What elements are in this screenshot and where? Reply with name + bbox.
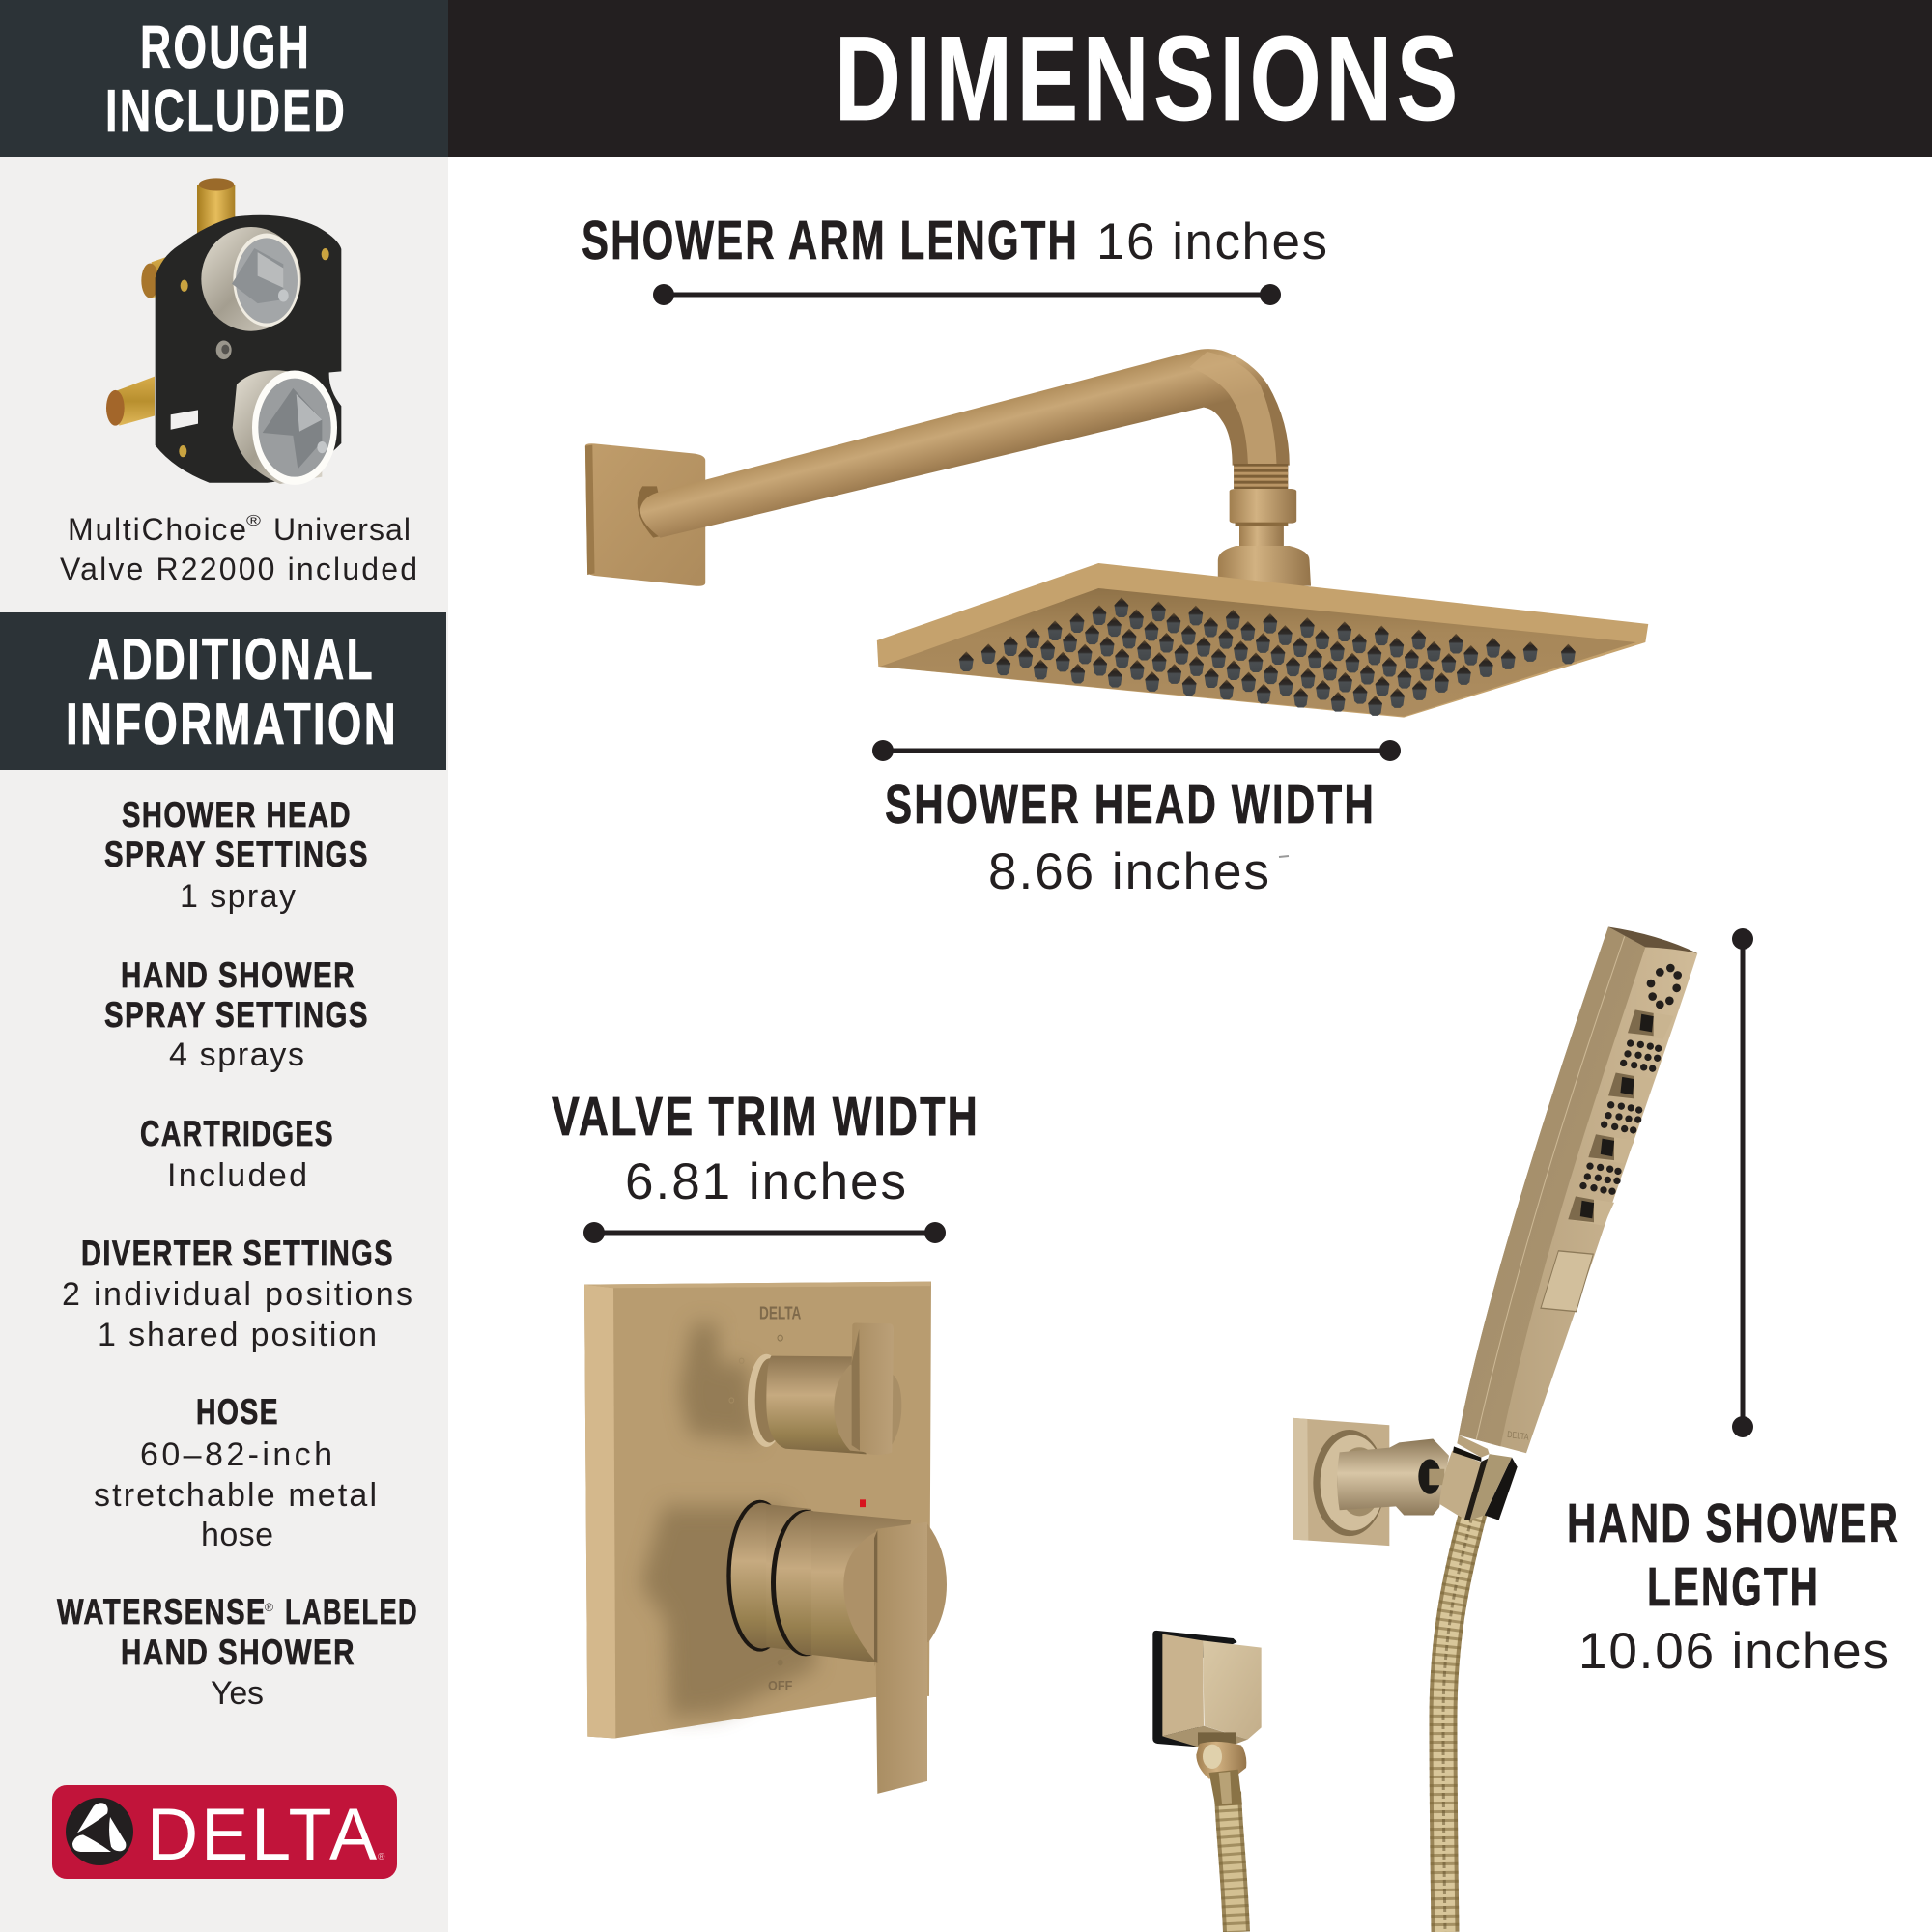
label: shower arm length: SHOWER ARM LENGTH (582, 210, 1079, 271)
image: shower arm and rain head (585, 349, 1648, 718)
spec: hose: stretchable metal (94, 1477, 377, 1514)
header panel: rough included: ROUGH (140, 14, 311, 81)
image: wall outlet elbow and hose (1152, 1631, 1262, 1932)
plate shadows (640, 1323, 818, 1717)
spec: hose: HOSE (196, 1392, 279, 1432)
threads and drop fitting (1218, 464, 1311, 586)
heading panel: additional information: ADDITIONAL (88, 627, 375, 692)
spec: hose: hose (201, 1517, 273, 1553)
label: valve trim width: VALVE TRIM WIDTH (552, 1086, 980, 1148)
spec: WaterSense labeled hand shower: WATERSENSE (57, 1592, 267, 1632)
label: shower head width dimension line (872, 740, 1401, 761)
label: valve trim width: 6.81 inches (625, 1153, 906, 1210)
header panel: rough included: INCLUDED (105, 78, 347, 145)
spec: WaterSense labeled hand shower: LABELED (285, 1592, 418, 1632)
lower temperature handle (726, 1500, 947, 1794)
spec: shower head spray settings: SPRAY SETTINGS (104, 835, 369, 874)
dimension line: shower arm (653, 284, 1281, 305)
label: shower head width: 8.66 inches (988, 843, 1269, 900)
logo: Delta (52, 1785, 397, 1879)
spec: hose: 60–82-inch (140, 1436, 332, 1473)
image: hand shower and wall bracket (1293, 927, 1697, 1546)
holder (1439, 1451, 1485, 1520)
spec: cartridges (140, 1114, 334, 1194)
wall flange (585, 443, 705, 586)
heading panel: additional information (0, 612, 446, 770)
spec: shower head spray settings: 1 spray (180, 878, 296, 915)
red marker (860, 1499, 866, 1507)
left sidebar background (0, 157, 448, 1932)
spray dots (1579, 1039, 1662, 1195)
button (1541, 1251, 1593, 1312)
trim plate (584, 1282, 931, 1739)
spec: cartridges: CARTRIDGES (140, 1114, 334, 1153)
image: MultiChoice rough-in valve (106, 178, 341, 485)
dimension line: hand shower length (1732, 928, 1753, 1437)
image: valve trim plate and handles (584, 1282, 947, 1794)
spec: shower head spray settings: SHOWER HEAD (122, 795, 352, 835)
label: valve trim width (552, 1086, 980, 1210)
handle body (1459, 927, 1697, 1453)
spec: hand shower spray settings: 4 sprays (169, 1037, 304, 1073)
label: hand shower length: LENGTH (1647, 1556, 1820, 1618)
upper diverter handle (748, 1323, 901, 1455)
label: shower arm length: 16 inches (1096, 213, 1327, 270)
spec: diverter settings: 2 individual positions (62, 1276, 412, 1313)
spec: WaterSense labeled hand shower (57, 1592, 418, 1712)
heading panel: additional information: INFORMATION (66, 692, 398, 756)
spec: shower head spray settings (104, 795, 369, 915)
spec: diverter settings: DIVERTER SETTINGS (81, 1234, 394, 1273)
spray slots (1568, 1009, 1674, 1226)
caption: MultiChoice valve: Valve R22000 included (60, 552, 417, 586)
spec: hand shower spray settings (104, 955, 369, 1073)
label: hand shower length: 10.06 inches (1578, 1623, 1889, 1680)
nozzles (959, 597, 1576, 716)
spec: diverter settings (62, 1234, 412, 1353)
caption: MultiChoice valve (60, 512, 417, 586)
label: hand shower length (1567, 1492, 1900, 1680)
caption: MultiChoice valve: Universal (273, 512, 411, 547)
bracket rings (1313, 1430, 1385, 1536)
caption: MultiChoice valve: ® (246, 513, 261, 529)
header panel: rough included (0, 0, 448, 157)
label: shower head width: SHOWER HEAD WIDTH (885, 774, 1376, 836)
dimension line: valve trim (583, 1222, 946, 1243)
engraved label: DELTA (1507, 1429, 1529, 1442)
wall bracket flange (1293, 1418, 1389, 1546)
spec: diverter settings: 1 shared position (98, 1317, 377, 1353)
black knob (1485, 1458, 1518, 1520)
spray ring (1647, 964, 1682, 1009)
logo: Delta: DELTA (147, 1794, 380, 1876)
caption: MultiChoice valve: MultiChoice (68, 512, 246, 547)
spec: WaterSense labeled hand shower: Yes (211, 1675, 264, 1712)
OFF marking: OFF (768, 1678, 792, 1693)
title: DIMENSIONS: DIMENSIONS (835, 13, 1463, 146)
header band: dimensions (448, 0, 1932, 157)
spec: hose (94, 1392, 377, 1553)
spec: hand shower spray settings: HAND SHOWER (121, 955, 355, 995)
shower arm tube (640, 349, 1290, 538)
logo on plate: DELTA (759, 1303, 802, 1323)
spec: WaterSense labeled hand shower: ® (265, 1601, 273, 1614)
spec: cartridges: Included (167, 1157, 307, 1194)
rain head frame (877, 563, 1648, 718)
spec: WaterSense labeled hand shower: HAND SHOWER (121, 1633, 355, 1672)
logo: Delta: ® (378, 1852, 385, 1862)
label: shower head width (885, 774, 1376, 900)
image: hose to hand shower (1443, 1509, 1474, 1932)
bracket arm (1337, 1439, 1449, 1515)
rain head underside (880, 588, 1636, 717)
spec: hand shower spray settings: SPRAY SETTINGS (104, 995, 369, 1035)
